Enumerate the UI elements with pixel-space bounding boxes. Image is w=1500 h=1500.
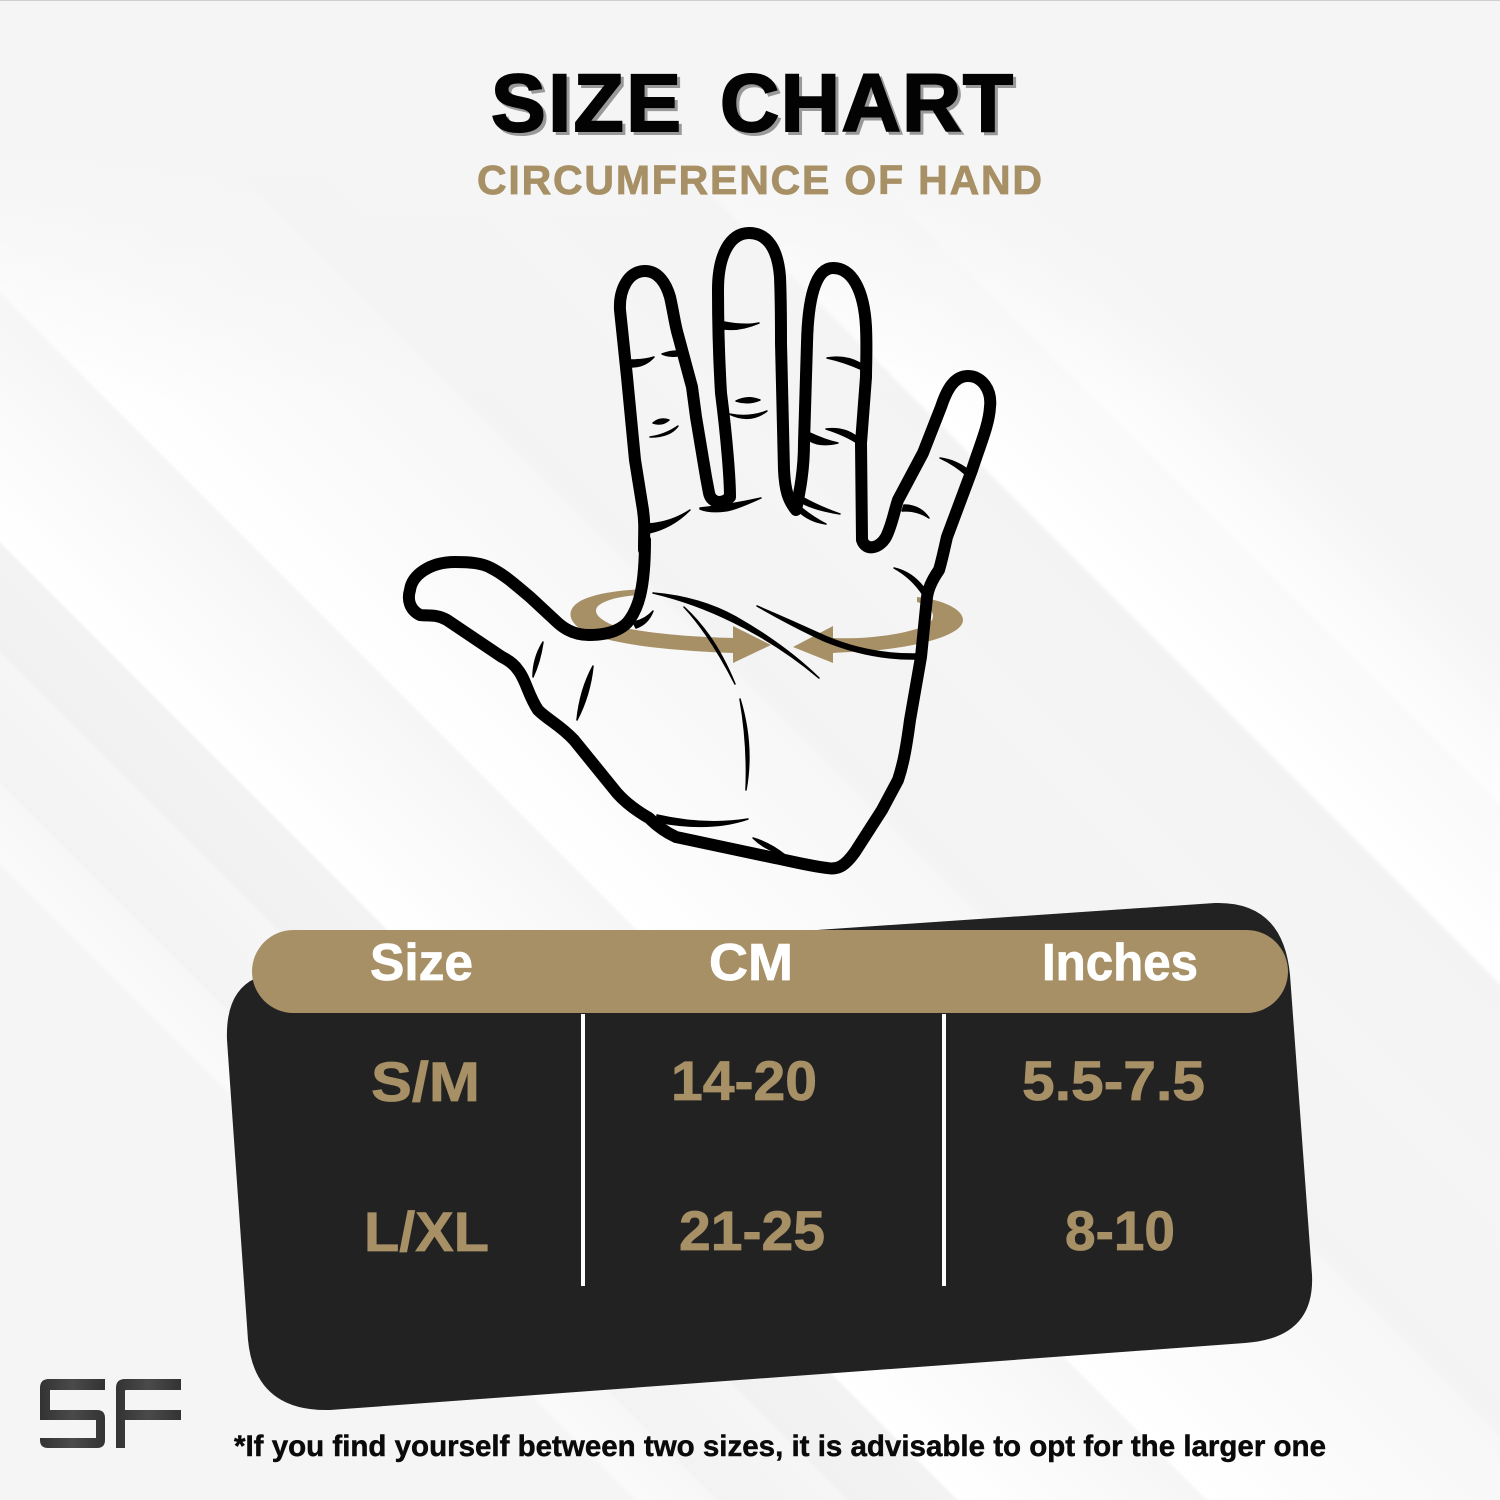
title: SIZE [494, 61, 684, 152]
row: S/M: 5.5-7.5 [1022, 1049, 1205, 1112]
subtitle: CIRCUMFRENCE OF HAND [477, 157, 1042, 203]
title: SIZE [491, 58, 681, 149]
icon: hand outline [409, 233, 990, 868]
header: cm: CM [709, 934, 793, 992]
row: L/XL: L/XL [364, 1200, 489, 1263]
title [491, 58, 1016, 152]
logo: SF [40, 1379, 181, 1448]
column dividers [581, 1014, 946, 1286]
row: L/XL: 21-25 [679, 1199, 825, 1262]
title: CHART [723, 61, 1016, 152]
table header bar [252, 930, 1288, 1013]
panel: dark table background [227, 903, 1312, 1410]
row: S/M: S/M [371, 1050, 480, 1113]
row: S/M: 14-20 [671, 1049, 817, 1112]
row: S/M [371, 1049, 1205, 1113]
measurement ring with arrows [570, 589, 963, 663]
header: inches: Inches [1042, 934, 1198, 992]
row: L/XL [364, 1199, 1175, 1263]
row: L/XL: 8-10 [1065, 1199, 1175, 1262]
header: size: Size [370, 934, 473, 992]
hand creases [533, 322, 967, 855]
footnote: *If you find yourself between two sizes, it is advisable to opt for the larger one [234, 1430, 1326, 1463]
title: CHART [720, 58, 1013, 149]
